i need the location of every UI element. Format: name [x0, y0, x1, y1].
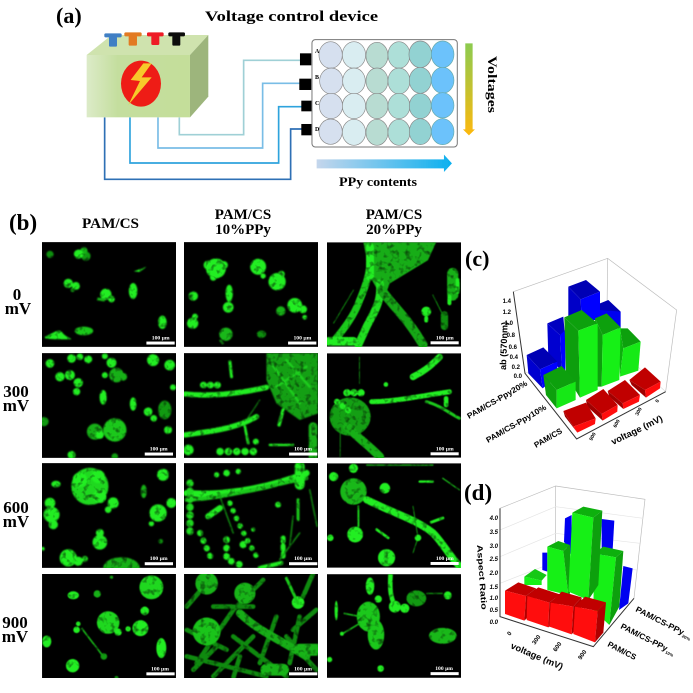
chart d axis labels: Aspect Ratio — [475, 545, 489, 610]
red bars — [563, 367, 661, 433]
well plate — [312, 40, 457, 147]
connector blocks — [299, 53, 313, 135]
micrograph: 10%PPy 900 mV: 100 µm — [294, 666, 312, 672]
chart c axis labels — [466, 299, 664, 450]
blue bars — [542, 515, 633, 610]
chart c axis labels: 0 — [654, 398, 661, 404]
micrograph: 20%PPy 300 mV — [327, 353, 461, 458]
micrograph: 10%PPy 600 mV: 100 µm — [294, 556, 312, 562]
column heading: PAM/CS: PAM/CS — [82, 216, 139, 232]
plate row letters: A — [315, 49, 320, 55]
chart c axis labels: 0.0 — [514, 374, 523, 380]
panel label (b): (b) — [9, 210, 37, 235]
column heading: PAM/CS 20%PPy: 20%PPy — [366, 222, 422, 238]
micrograph: 20%PPy 600 mV — [327, 463, 461, 568]
micrograph: PAM/CS 900 mV — [42, 574, 176, 678]
chart c axis labels: 0.2 — [512, 365, 521, 371]
chart c axis labels: 1.2 — [503, 310, 512, 316]
chart c axis labels: 0.8 — [507, 333, 516, 339]
chart d axis labels — [475, 516, 693, 672]
chart d axis labels: voltage (mV) — [509, 641, 565, 672]
chart c axis labels: 0.4 — [510, 355, 519, 361]
panel label (c): (c) — [465, 246, 489, 271]
micrograph: 10%PPy 300 mV — [184, 353, 318, 458]
row label: 300 mV: mV — [3, 396, 30, 415]
battery box — [87, 32, 208, 117]
green bars — [524, 507, 623, 625]
chart d axis labels: PAM/CS-PPy — [634, 605, 681, 635]
chart d axis labels: PAM/CS — [606, 640, 638, 662]
wires — [105, 60, 302, 179]
3D bar chart: aspect ratio vs voltage — [500, 486, 645, 647]
3D bar chart: absorbance vs voltage — [513, 258, 677, 439]
chart d axis labels: 600 — [553, 641, 564, 653]
micrograph: PAM/CS 600 mV — [42, 463, 176, 568]
chart c axis labels: 600 — [612, 419, 622, 429]
chart d axis labels: 900 — [578, 649, 589, 661]
chart d axis labels: PAM/CS-PPy — [619, 622, 666, 652]
chart d axis labels: 3.5 — [490, 530, 499, 536]
plate row letters — [315, 49, 320, 133]
micrograph: 10%PPy 600 mV — [184, 463, 318, 568]
micrograph: 20%PPy 0 mV: 100 µm — [436, 335, 454, 341]
chart c axis labels: PAM/CS-Ppy20% — [466, 379, 529, 421]
plate row letters: C — [315, 101, 319, 107]
plate row letters: B — [315, 75, 319, 81]
chart c axis labels: 0.6 — [509, 345, 518, 351]
label: ppy contents: PPy contents — [339, 174, 417, 189]
label: voltages: Voltages — [485, 56, 500, 113]
column heading: PAM/CS 10%PPy: 10%PPy — [215, 222, 271, 238]
chart d axis labels: 4.0 — [489, 516, 499, 522]
micrograph: 20%PPy 900 mV: 100 µm — [435, 666, 453, 672]
chart c axis labels: ab (570nm) — [498, 322, 510, 370]
micrograph: PAM/CS 0 mV — [42, 242, 176, 347]
chart frame — [513, 258, 677, 392]
chart frame — [500, 486, 645, 598]
chart d axis labels: 2.5 — [489, 557, 499, 563]
chart d axis labels: 20% — [681, 633, 692, 642]
row label: 300 mV: 300 — [3, 382, 29, 401]
micrograph: PAM/CS 300 mV: 100 µm — [150, 447, 168, 453]
chart d axis labels: 2.0 — [489, 571, 499, 577]
row label: 900 mV: mV — [2, 627, 29, 646]
column heading: PAM/CS 20%PPy: PAM/CS — [366, 207, 422, 223]
chart d axis labels: 1.5 — [490, 585, 499, 591]
chart c axis labels: 1.4 — [503, 299, 512, 305]
chart d axis labels: 0 — [507, 630, 514, 637]
micrograph: 20%PPy 0 mV — [327, 242, 461, 347]
micrograph: 20%PPy 600 mV: 100 µm — [436, 556, 454, 562]
column heading: PAM/CS 10%PPy: PAM/CS — [215, 207, 271, 223]
chart d axis labels: 0.5 — [490, 608, 499, 614]
diagram: voltage control device and well plate — [87, 32, 475, 179]
ppy contents arrow — [317, 155, 452, 172]
panel label (a): (a) — [56, 3, 82, 28]
row label: 900 mV: 900 — [2, 613, 28, 632]
chart c axis labels: 900 — [588, 432, 598, 442]
chart c axis labels: PAM/CS-Ppy10% — [484, 403, 548, 445]
chart d axis labels: 10% — [664, 650, 675, 658]
micrograph: PAM/CS 0 mV: 100 µm — [152, 336, 170, 342]
green bars — [543, 310, 641, 408]
chart c axis labels: 300 — [634, 407, 644, 417]
micrograph: PAM/CS 300 mV — [42, 353, 176, 458]
micrograph: 20%PPy 300 mV: 100 µm — [436, 446, 454, 452]
row label: 600 mV: 600 — [3, 498, 29, 517]
chart d axis labels: 300 — [532, 634, 543, 646]
row label: 0 mV: 0 — [13, 285, 21, 304]
chart c axis labels: PAM/CS — [532, 426, 564, 450]
chart c axis labels: 1.0 — [505, 321, 514, 327]
chart d axis labels: 0.0 — [490, 620, 499, 626]
micrograph: 10%PPy 900 mV — [184, 574, 318, 678]
micrograph: 10%PPy 0 mV: 100 µm — [293, 336, 312, 342]
red bars — [505, 582, 606, 642]
micrograph: 20%PPy 900 mV — [327, 574, 461, 678]
micrograph: PAM/CS 900 mV: 100 µm — [151, 666, 169, 672]
row label: 0 mV: mV — [5, 299, 32, 318]
micrograph: 10%PPy 300 mV: 100 µm — [294, 447, 312, 453]
blue bars — [527, 280, 621, 388]
voltages arrow — [463, 43, 475, 135]
panel label (d): (d) — [464, 480, 492, 505]
chart d axis labels: 1.0 — [490, 596, 499, 602]
plate row letters: D — [315, 127, 320, 133]
chart d axis labels: 3.0 — [490, 544, 499, 550]
heading: voltage control device: Voltage control device — [205, 9, 378, 25]
micrograph: PAM/CS 600 mV: 100 µm — [150, 556, 168, 562]
row label: 600 mV: mV — [3, 512, 30, 531]
micrograph: 10%PPy 0 mV — [184, 242, 318, 347]
chart c axis labels: voltage (mV) — [609, 413, 664, 447]
